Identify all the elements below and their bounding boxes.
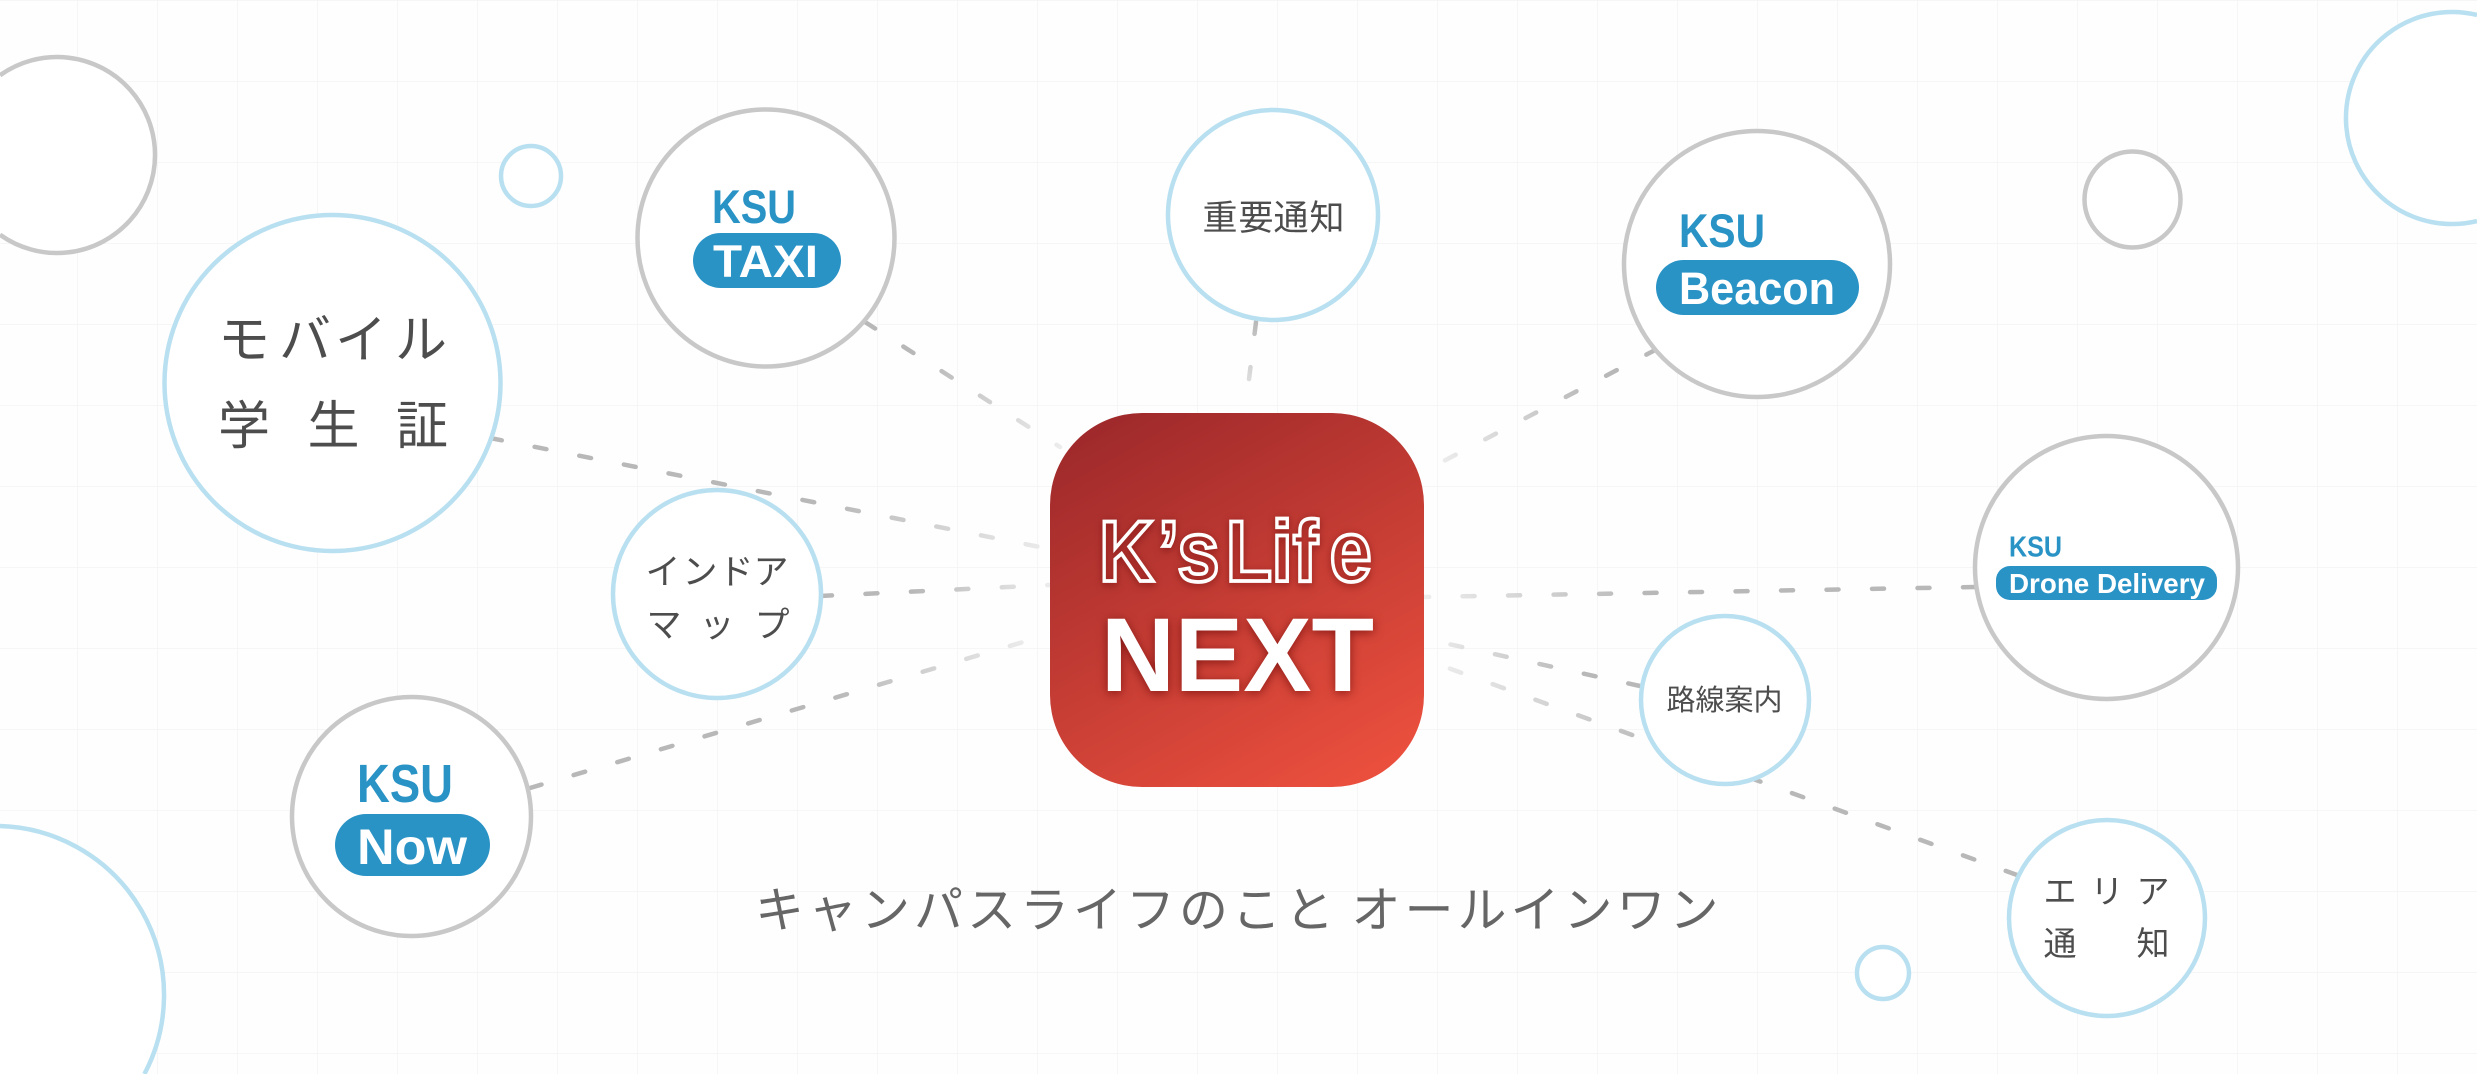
connector: route guide to app icon xyxy=(1430,640,1640,686)
node: KSU Now: KSU xyxy=(357,754,453,814)
decorative circle: bottom left blue xyxy=(0,826,164,1074)
node: mobile student ID xyxy=(164,215,500,551)
node: KSU Drone Delivery xyxy=(1975,436,2238,699)
connector: beacon to app icon xyxy=(1440,349,1657,463)
node: KSU TAXI xyxy=(638,110,894,366)
node: area notice xyxy=(2009,820,2205,1016)
node: KSU Now: Now xyxy=(357,819,467,875)
node: KSU Drone Delivery: Drone Delivery xyxy=(2009,568,2205,599)
node: KSU Beacon: Beacon xyxy=(1679,263,1835,314)
decorative circle: small grey top right xyxy=(2084,152,2180,248)
node: KSU Now xyxy=(292,697,531,936)
node: route guide: 路線案内 xyxy=(1666,684,1783,717)
node: KSU TAXI: KSU xyxy=(712,180,796,233)
connector: taxi to app icon xyxy=(865,322,1060,447)
node: mobile student ID: 学生証 xyxy=(218,398,448,456)
node: KSU TAXI: TAXI xyxy=(713,236,818,287)
decorative circle: top right blue xyxy=(2346,12,2477,224)
node: route guide xyxy=(1641,616,1809,784)
node: indoor map: インドア xyxy=(645,553,789,592)
tagline: キャンパスライフのこと オールインワン xyxy=(755,884,1719,938)
connector: drone delivery to app icon xyxy=(1424,587,1975,597)
node: area notice: エリア xyxy=(2044,873,2170,910)
node: indoor map: マップ xyxy=(646,606,790,645)
connector: indoor map to app icon xyxy=(820,585,1050,596)
node: important notice xyxy=(1168,110,1378,320)
node: mobile student ID: モバイル xyxy=(218,312,447,370)
node: KSU Beacon xyxy=(1624,131,1890,397)
node: important notice: 重要通知 xyxy=(1202,199,1345,238)
node: KSU Drone Delivery: KSU xyxy=(2009,532,2062,564)
node: KSU Beacon: KSU xyxy=(1679,204,1765,257)
decorative circle: top left grey xyxy=(0,57,155,253)
logo text: K'sLife outlined: K’sLife xyxy=(1099,505,1372,600)
node: indoor map xyxy=(613,490,821,698)
connector: mobile student ID to app icon xyxy=(490,438,1050,549)
app icon: K'sLife NEXT xyxy=(1050,413,1424,787)
decorative circle: small blue top left xyxy=(501,146,561,206)
node: area notice: 通知 xyxy=(2044,925,2170,962)
connector: important notice to app icon xyxy=(1245,322,1256,412)
logo text: NEXT: NEXT xyxy=(1101,597,1374,714)
connector: area notice to app icon xyxy=(1440,665,2017,875)
connector: KSU Now to app icon xyxy=(530,640,1030,788)
decorative circle: small blue bottom right xyxy=(1857,947,1909,999)
